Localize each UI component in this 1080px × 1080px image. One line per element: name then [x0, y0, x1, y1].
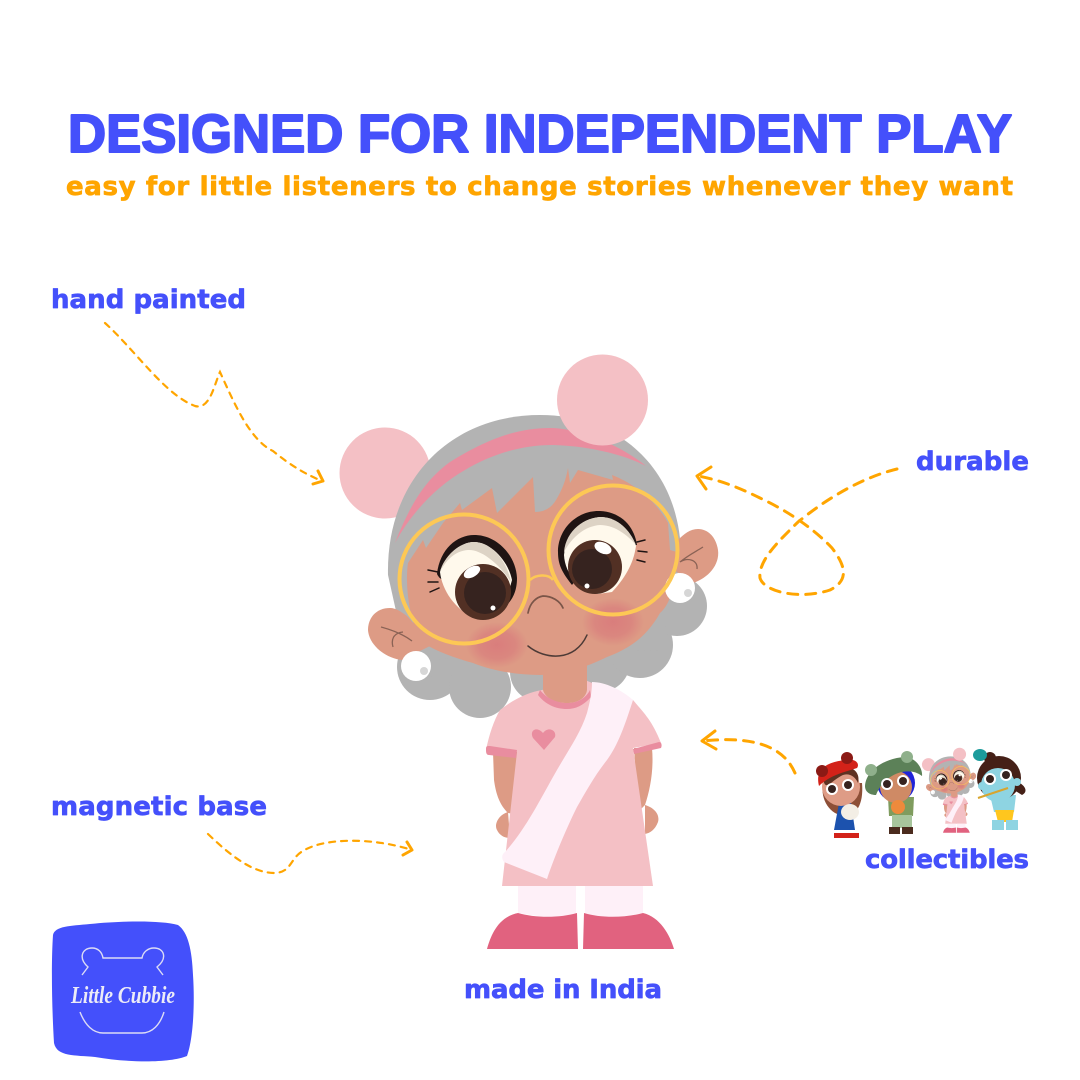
figure: blue child with flute — [973, 749, 1025, 830]
arrow: durable to character — [697, 467, 897, 594]
logo: Little Cubbie — [52, 922, 194, 1061]
label: hand painted: hand painted — [51, 285, 246, 315]
subtitle: easy for little listeners to change stories whenever they want — [66, 172, 1013, 202]
arrow: hand painted to character — [105, 323, 323, 484]
title: DESIGNED FOR INDEPENDENT PLAY — [68, 104, 1012, 164]
figure: child in green hat — [865, 751, 922, 834]
label: made in India: made in India — [464, 975, 662, 1005]
arrow: collectibles to character — [702, 731, 795, 773]
label: magnetic base: magnetic base — [51, 792, 267, 822]
figure: grandmother miniature — [922, 748, 976, 833]
figure: girl in red hat — [816, 752, 862, 838]
label: collectibles: collectibles — [865, 845, 1029, 875]
logo: Little Cubbie: Little Cubbie — [70, 983, 175, 1009]
collectibles figures — [816, 748, 1025, 838]
main character: grandmother figure — [340, 354, 718, 949]
arrow: magnetic base to character — [208, 834, 412, 873]
label: durable: durable — [916, 447, 1029, 477]
